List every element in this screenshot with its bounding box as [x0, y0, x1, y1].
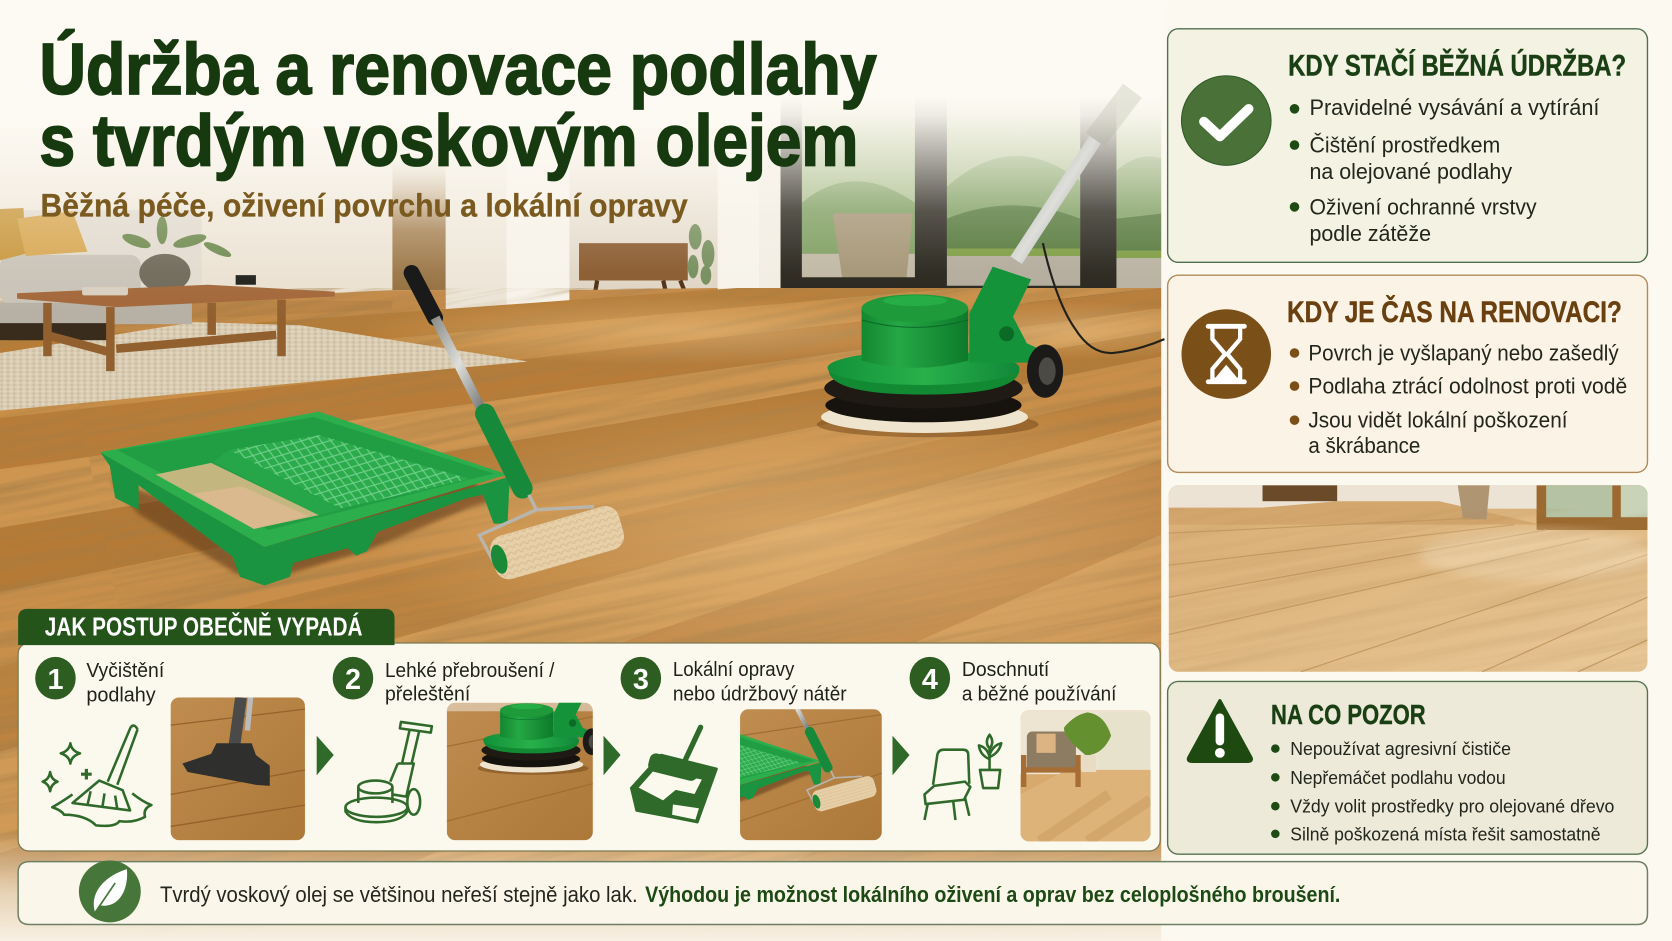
label 2: Lehké přebroušení / — [385, 660, 555, 682]
number 1: 1 — [47, 664, 63, 696]
heading: NA CO POZOR — [1271, 699, 1426, 730]
label 4: Doschnutí — [962, 659, 1050, 681]
number 4: 4 — [922, 664, 938, 696]
list — [1271, 738, 1614, 844]
icon: leaf — [79, 861, 141, 922]
note bar — [18, 861, 1647, 925]
arrow 3 — [893, 736, 910, 775]
label 2 — [385, 660, 555, 706]
number 2: 2 — [345, 664, 361, 696]
arrow 1 — [317, 736, 334, 775]
sofa with pillows — [0, 208, 202, 340]
paint tray — [100, 412, 510, 585]
label 2: přeleštění — [385, 684, 471, 706]
title: Údržba a renovace podlahy — [39, 29, 877, 110]
number 1 — [35, 657, 76, 700]
list: Pravidelné vysávání a vytírání — [1309, 95, 1600, 120]
list: Nepřemáčet podlahu vodou — [1290, 767, 1506, 788]
icon: mop — [43, 726, 151, 826]
title — [39, 29, 877, 181]
photo: vacuum — [171, 697, 305, 840]
icon: hourglass — [1181, 309, 1271, 399]
room wall — [0, 128, 1173, 315]
icon: check — [1181, 76, 1271, 165]
label 1 — [86, 660, 165, 707]
window with garden — [759, 96, 1165, 309]
background scene — [0, 106, 1162, 941]
roller — [412, 273, 627, 583]
list — [1290, 340, 1627, 458]
panel: process steps — [18, 609, 1160, 851]
panel: caution — [1168, 681, 1647, 854]
label 3: nebo údržbový nátěr — [673, 684, 847, 706]
wood floor — [0, 288, 1162, 930]
label 1: podlahy — [86, 685, 157, 707]
label 1: Vyčištění — [86, 660, 165, 682]
panel: routine maintenance — [1168, 29, 1647, 262]
title: s tvrdým voskovým olejem — [39, 100, 858, 181]
note text: Tvrdý voskový olej se většinou neřeší stejně jako lak. — [160, 882, 638, 907]
list: Silně poškozená místa řešit samostatně — [1290, 823, 1601, 844]
list: a škrábance — [1308, 433, 1420, 458]
number 3: 3 — [633, 664, 649, 696]
list — [1290, 95, 1600, 246]
doorway and wooden console — [392, 128, 719, 300]
photo: polisher — [446, 702, 593, 840]
arrow 2 — [604, 736, 621, 775]
list: Nepoužívat agresivní čističe — [1290, 738, 1511, 759]
rug — [0, 322, 528, 411]
bottom fade — [0, 832, 1173, 941]
list: podle zátěže — [1309, 221, 1431, 246]
top fade — [0, 0, 1173, 320]
panel: renovation — [1168, 275, 1647, 472]
floor polisher — [817, 91, 1164, 437]
photo: renovated floor — [1169, 485, 1653, 672]
subtitle: Běžná péče, oživení povrchu a lokální opravy — [41, 188, 688, 224]
number 4 — [910, 657, 950, 700]
list: na olejované podlahy — [1309, 159, 1513, 184]
note text — [160, 882, 1340, 907]
icon: tray and roller — [631, 727, 717, 822]
list: Vždy volit prostředky pro olejované dřevo — [1290, 796, 1614, 817]
step 1 — [35, 657, 305, 840]
white pillars — [446, 128, 759, 321]
label 3 — [673, 659, 847, 706]
label 4: a běžné používání — [962, 684, 1117, 706]
right column backdrop — [1161, 0, 1672, 941]
step 4 — [910, 657, 1151, 841]
list: Jsou vidět lokální poškození — [1308, 408, 1568, 433]
step 2 — [333, 657, 601, 840]
icon: chair and plant — [925, 735, 1001, 820]
list: Podlaha ztrácí odolnost proti vodě — [1308, 374, 1627, 399]
number 3 — [621, 657, 661, 700]
label 3: Lokální opravy — [673, 659, 795, 681]
list: Čištění prostředkem — [1309, 133, 1500, 158]
number 2 — [333, 657, 373, 700]
list: Oživení ochranné vrstvy — [1309, 194, 1537, 219]
tab heading — [18, 609, 395, 645]
step 3 — [621, 657, 882, 840]
photo: sunny room — [1020, 710, 1151, 841]
list: Povrch je vyšlapaný nebo zašedlý — [1308, 340, 1619, 365]
coffee table and vase — [17, 217, 335, 371]
note text: Výhodou je možnost lokálního oživení a oprav bez celoplošného broušení. — [645, 882, 1340, 907]
tab heading: JAK POSTUP OBEČNĚ VYPADÁ — [45, 612, 363, 642]
icon: polisher — [345, 722, 432, 822]
icon: warning — [1188, 701, 1251, 761]
label 4 — [962, 659, 1117, 706]
photo: tray and roller — [740, 709, 882, 840]
